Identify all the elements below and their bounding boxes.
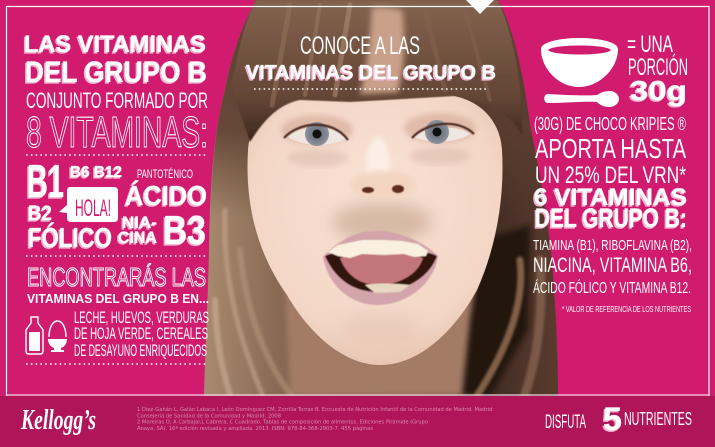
- vitamin word cloud: B1: [27, 155, 64, 207]
- vitamin word cloud: B2: [28, 202, 52, 225]
- facial shading: [288, 137, 470, 344]
- vitamin word cloud: CINA: [118, 228, 157, 247]
- neck: [285, 280, 480, 396]
- subheading: encontrarás las: ENCONTRARÁS LAS: [27, 262, 206, 292]
- subheading: conjunto formado: CONJUNTO FORMADO POR: [26, 88, 208, 113]
- subheading: vitaminas del grupo B en: VITAMINAS DEL GRUPO B EN...: [27, 291, 209, 306]
- left panel: vitamins: [24, 31, 209, 364]
- footer slogan: disfruta 5 nutrientes: [545, 401, 692, 437]
- footer references: 2 Moreiras O, A Carbajal,L Cabrera, C Cuadrado. Tablas de composición de alimentos. Ediciones Pirámide (Grupo: [137, 418, 429, 426]
- center title: CONOCE A LAS: [300, 32, 420, 60]
- food list: [74, 308, 209, 360]
- speech bubble: hola: [59, 187, 118, 222]
- left eye: [281, 115, 353, 146]
- vitamin word cloud: B6 B12: [70, 164, 122, 181]
- footer slogan: disfruta 5 nutrientes: 5: [603, 401, 622, 437]
- icon: egg in cup: [48, 321, 67, 352]
- footer references: [137, 406, 494, 432]
- speech bubble: hola: HOLA!: [75, 195, 111, 222]
- icon: bowl: [541, 38, 618, 87]
- portion text: 30g: [630, 75, 687, 106]
- photo: smiling girl: [204, 0, 558, 396]
- vitamin word cloud: B3: [163, 207, 206, 253]
- icon: spoon: [544, 91, 619, 107]
- face: [247, 95, 503, 365]
- dark hair shadow: [462, 225, 530, 396]
- vitamins list: [533, 237, 692, 297]
- logo: Kellogg's: Kellogg’s: [20, 404, 96, 436]
- center title: VITAMINAS DEL GRUPO B: [246, 62, 496, 84]
- icon: milk bottle: [26, 317, 43, 354]
- footer references: 1 Díez-Gañán L, Galán Labaca I, León Domínguez CM, Zorrilla Torras B. Encuesta de Nutrición Infantil de la Comunidad de Madrid. Madrid:: [137, 406, 494, 413]
- food list: DE DESAYUNO ENRIQUECIDOS: [74, 341, 207, 360]
- hair: [204, 0, 558, 396]
- upper hair shade: [211, 0, 542, 206]
- heading: 6 vitaminas del grupo B: [534, 184, 687, 233]
- top notch: [466, 0, 494, 14]
- portion text: [627, 31, 688, 106]
- heading: las vitaminas del grupo B: LAS VITAMINAS: [24, 31, 206, 58]
- food list: LECHE, HUEVOS, VERDURAS: [74, 308, 209, 327]
- footer references: Anaya, SA). 16ª edición revisada y ampliada. 2013. ISBN: 978-84-368-2903-7. 455 páginas: [137, 425, 373, 432]
- forehead gap: [360, 7, 404, 94]
- subheading: 8 vitaminas: 8 VITAMINAS:: [26, 108, 208, 157]
- heading: 6 vitaminas del grupo B: 6 VITAMINAS: [534, 184, 687, 211]
- nose: [350, 171, 416, 199]
- vitamin word cloud: NIA-: [122, 213, 157, 232]
- mouth: [323, 231, 438, 305]
- footer slogan: disfruta 5 nutrientes: DISFUTA: [545, 412, 586, 433]
- vitamin word cloud: ÁCIDO: [125, 180, 207, 211]
- food list: DE HOJA VERDE, CEREALES: [74, 324, 208, 343]
- bang strands: [272, 5, 490, 105]
- portion text: = UNA: [627, 31, 673, 58]
- footer band: [0, 396, 715, 447]
- vitamin word cloud: PANTOTÉNICO: [137, 166, 193, 181]
- heading: las vitaminas del grupo B: DEL GRUPO B: [25, 56, 207, 89]
- heading: las vitaminas del grupo B: [24, 31, 207, 89]
- claim text: [534, 114, 686, 189]
- right panel: portion: [533, 31, 692, 314]
- frame bottom line: [6, 394, 709, 396]
- center title: [246, 32, 496, 89]
- bangs: [232, 0, 522, 142]
- tan hair strands: [215, 210, 541, 394]
- vitamin word cloud: FÓLICO: [28, 222, 112, 253]
- right eye: [404, 113, 476, 144]
- vitamin word cloud: [27, 155, 207, 253]
- footer references: Consejería de Sanidad de la Comunidad y Madrid; 2008: [137, 412, 281, 420]
